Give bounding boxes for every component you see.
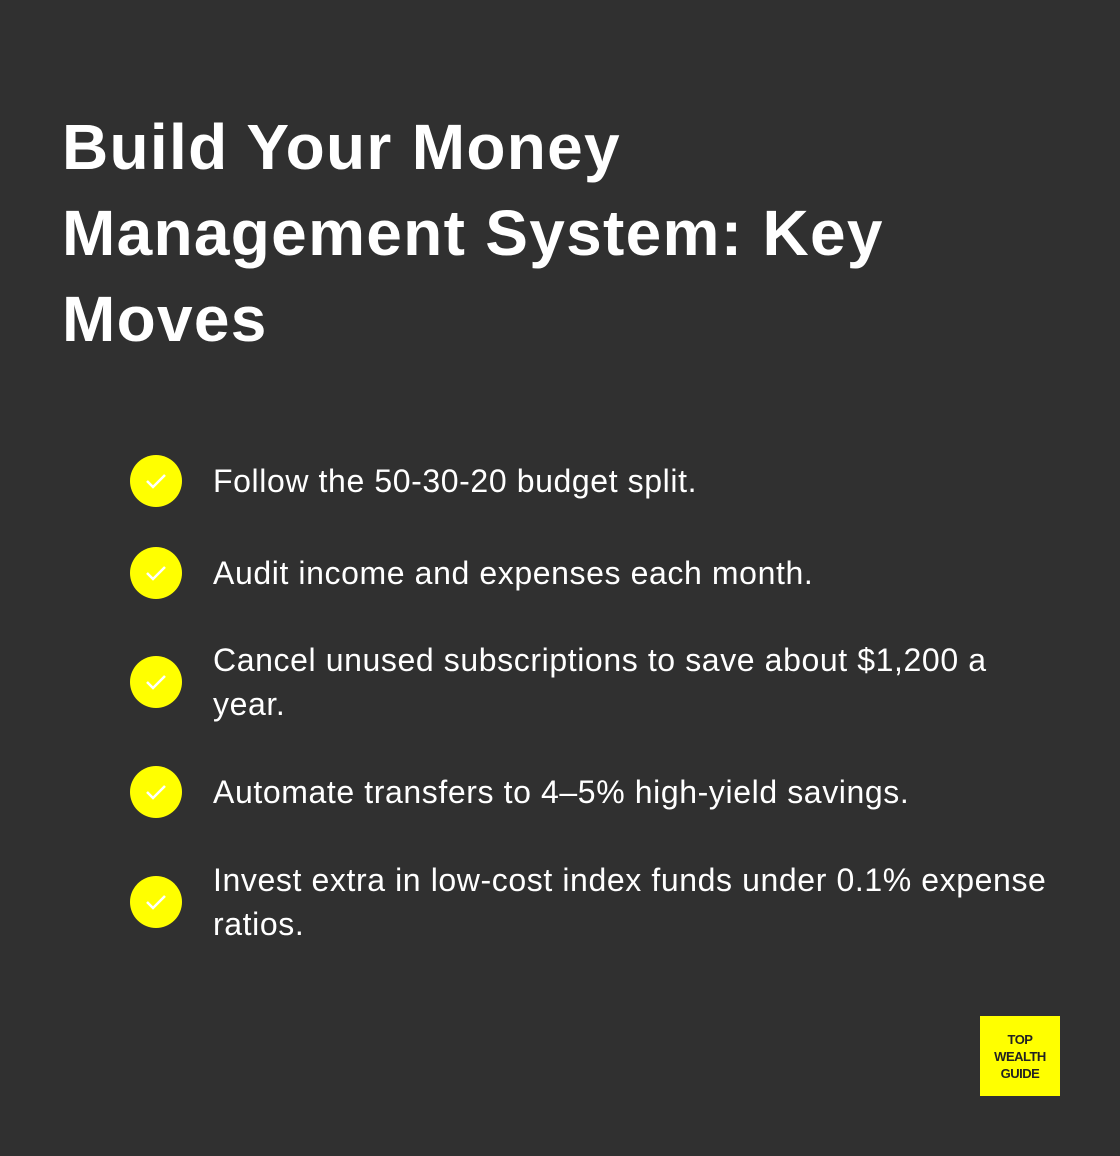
title: Management System: Key (62, 197, 884, 269)
logo: WEALTH (994, 1048, 1046, 1064)
text (213, 642, 987, 722)
text: ratios. (213, 906, 304, 942)
text: year. (213, 686, 285, 722)
icon: check (130, 455, 182, 507)
text: Invest extra in low-cost index funds under 0.1% expense (213, 862, 1046, 898)
title: Moves (62, 283, 268, 355)
icon: check (130, 766, 182, 818)
title: Build Your Money (62, 111, 621, 183)
item 5 (130, 862, 1046, 942)
text: Cancel unused subscriptions to save about $1,200 a (213, 642, 987, 678)
text (213, 862, 1046, 942)
logo: TOP (1007, 1032, 1032, 1046)
title (62, 111, 884, 355)
icon: check (130, 656, 182, 708)
text: Audit income and expenses each month. (213, 555, 813, 591)
logo (980, 1016, 1060, 1096)
text: Automate transfers to 4–5% high-yield savings. (213, 774, 909, 810)
text: Follow the 50-30-20 budget split. (213, 463, 697, 499)
item 1 (130, 455, 697, 507)
item 2 (130, 547, 813, 599)
icon: check (130, 547, 182, 599)
item 4 (130, 766, 909, 818)
icon: check (130, 876, 182, 928)
item 3 (130, 642, 987, 722)
logo: GUIDE (1001, 1066, 1039, 1080)
